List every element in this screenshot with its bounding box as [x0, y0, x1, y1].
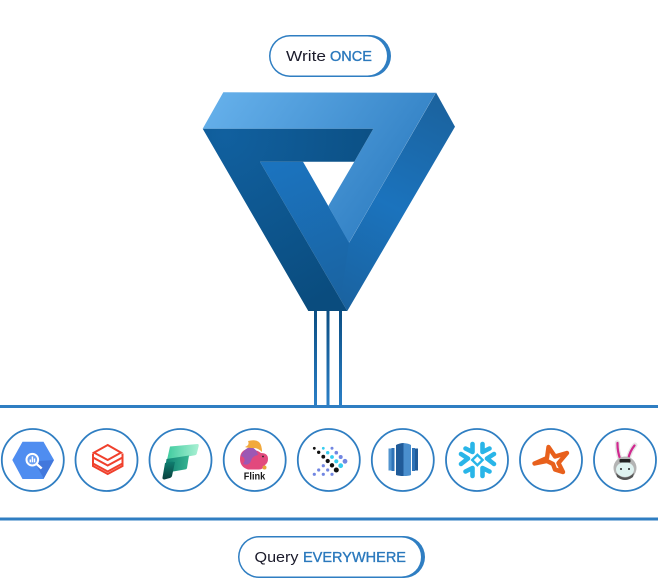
connector lines — [314, 311, 342, 406]
badge: Query EVERYWHERE: Query — [254, 549, 299, 566]
icon: BigQuery — [2, 429, 64, 491]
badge: Write ONCE: Write — [286, 48, 326, 65]
icon: astronaut bunny — [594, 429, 656, 491]
badge: Query EVERYWHERE — [238, 536, 425, 578]
badge: Write ONCE — [269, 35, 391, 77]
band top rule — [0, 405, 658, 408]
impossible triangle logo — [203, 92, 455, 311]
badge: Write ONCE: ONCE — [330, 48, 372, 65]
icon: Apache Flink: Flink — [244, 472, 266, 482]
icon: orange star — [520, 429, 582, 491]
icon: Microsoft Fabric — [150, 429, 212, 491]
band bottom rule — [0, 518, 658, 520]
icon: Amazon Redshift — [372, 429, 434, 491]
icon: Databricks — [76, 429, 138, 491]
icon: Snowflake — [446, 429, 508, 491]
icon: Apache Flink — [224, 429, 286, 491]
icon: dotted data logo — [298, 429, 360, 491]
engine logos row — [2, 429, 656, 491]
badge: Query EVERYWHERE: EVERYWHERE — [303, 549, 406, 566]
